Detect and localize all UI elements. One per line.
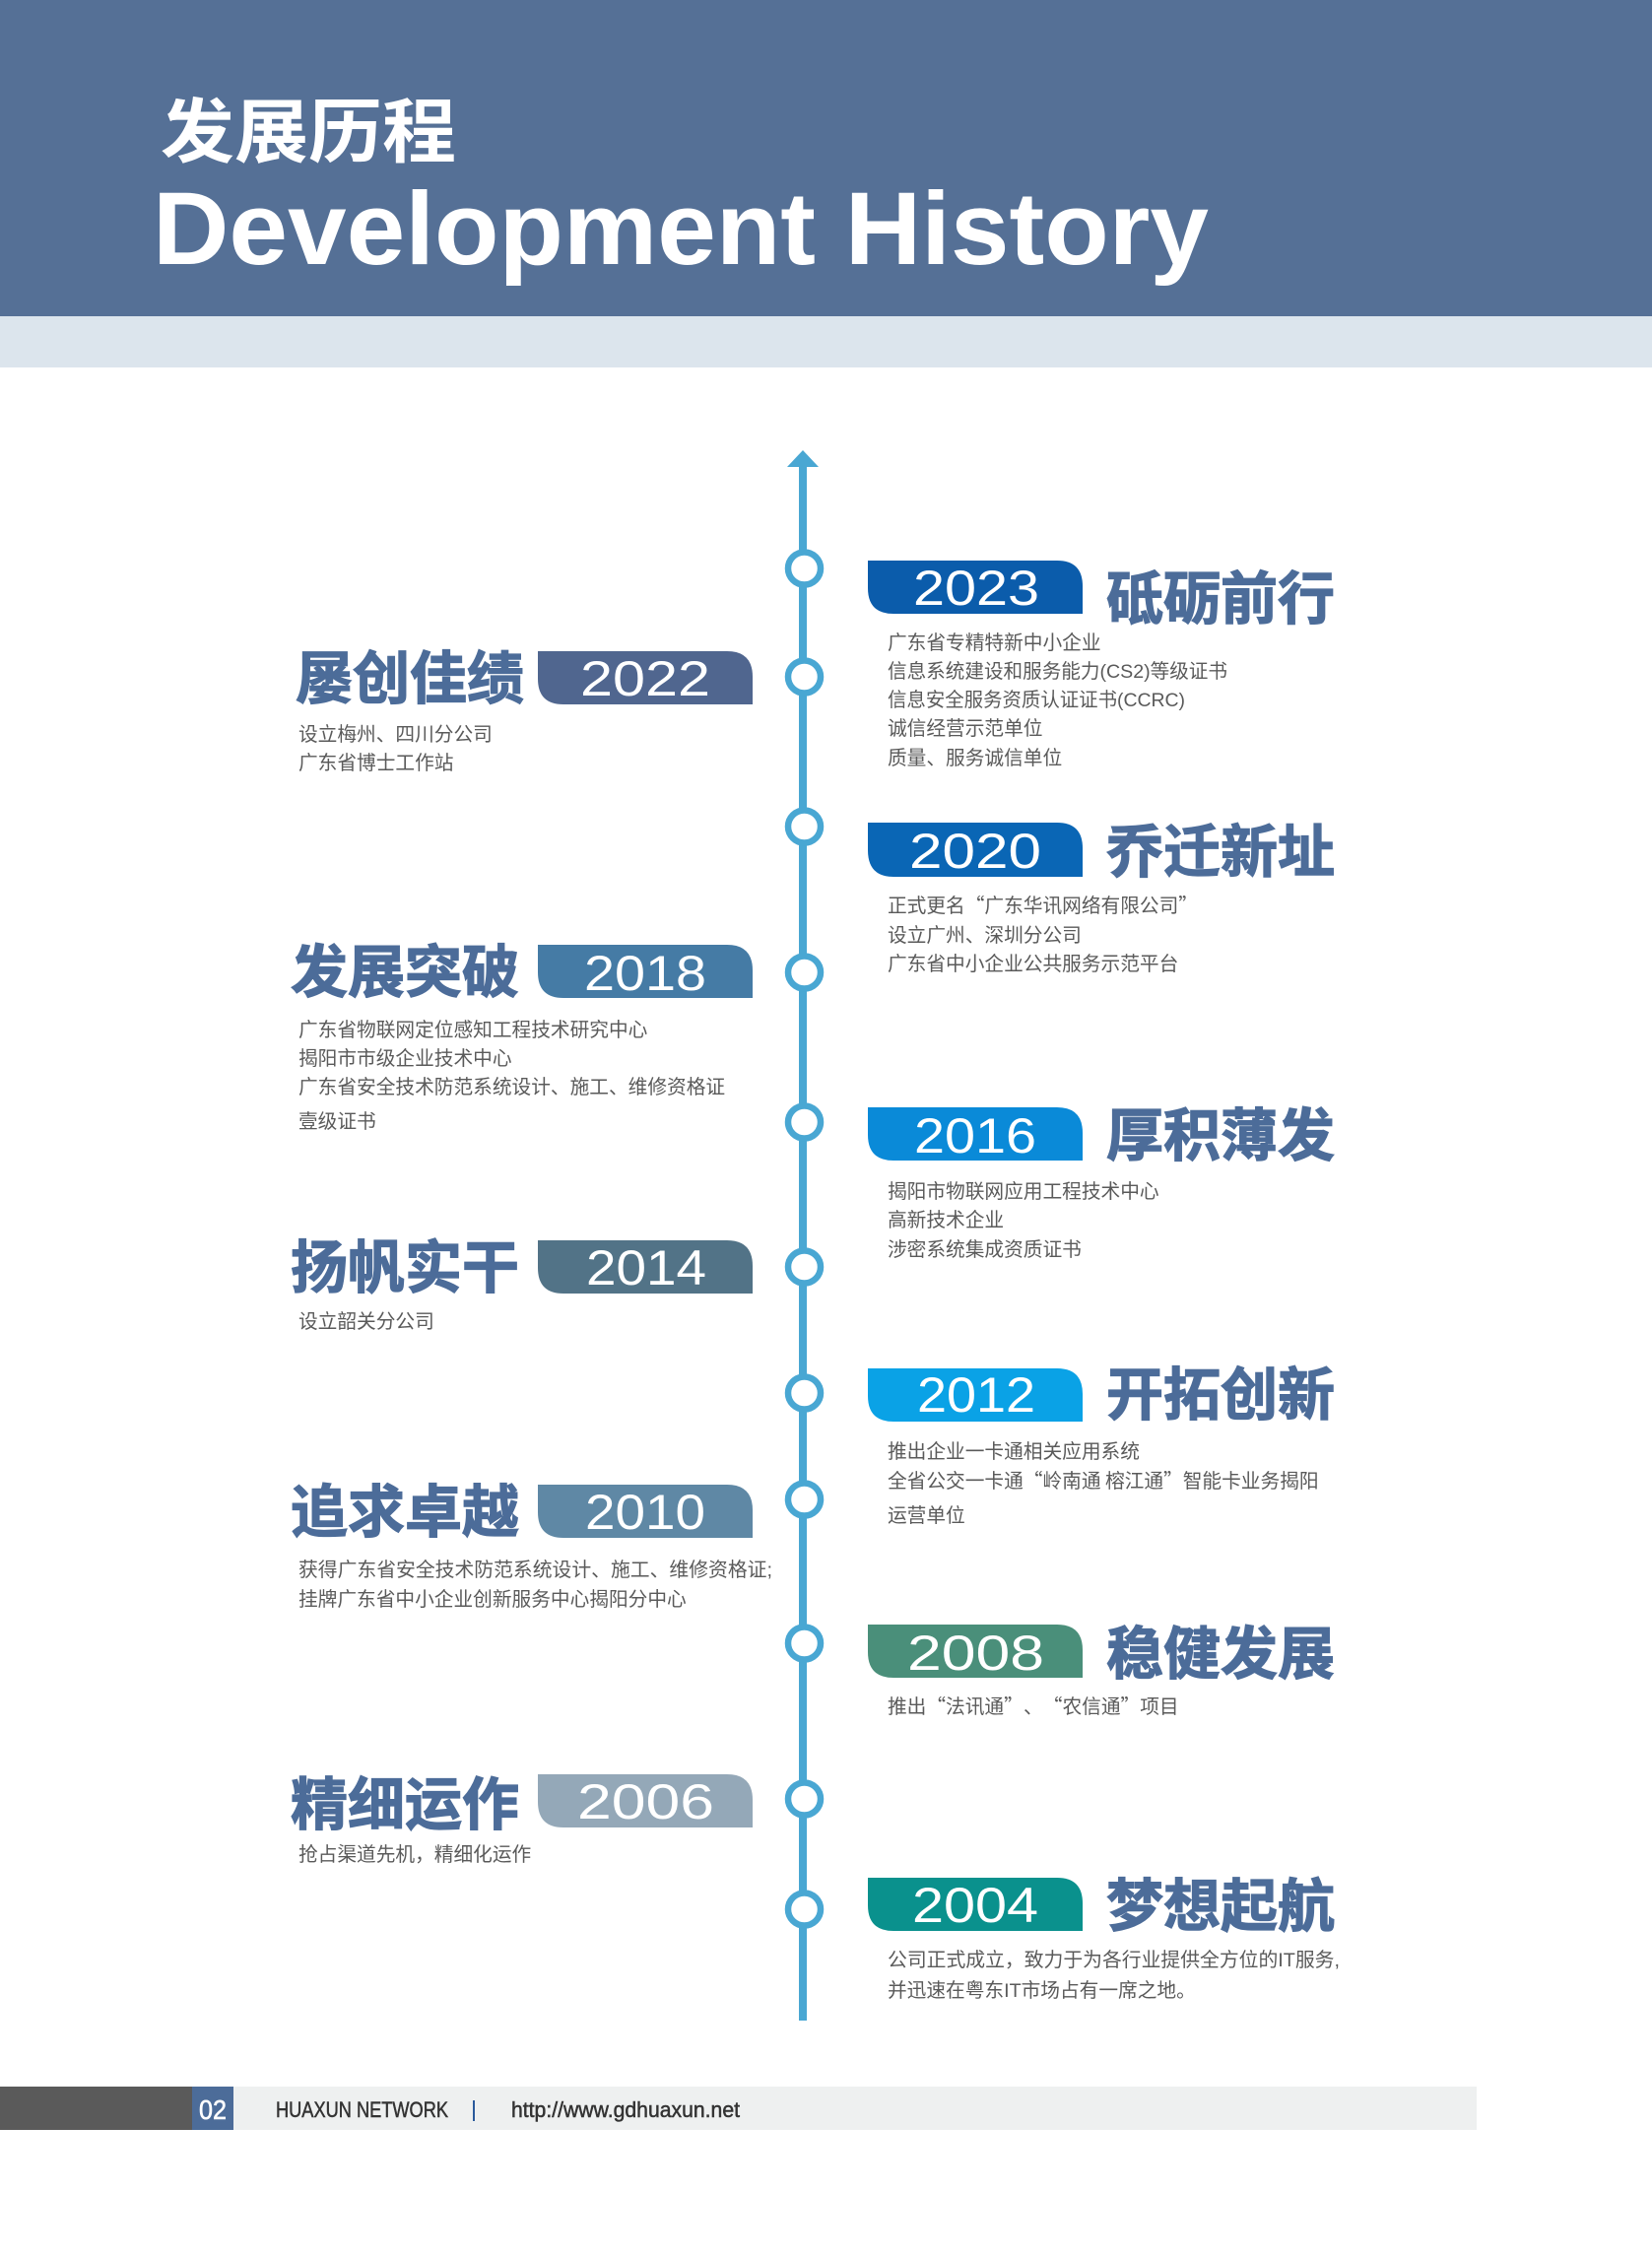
entry 2022: 2022	[580, 651, 710, 706]
entry 2010: 获得广东省安全技术防范系统设计、施工、维修资格证;	[298, 1560, 772, 1581]
entry 2010: 2010	[585, 1485, 705, 1540]
entry 2022: 广东省博士工作站	[298, 753, 453, 774]
entry 2012: 推出企业一卡通相关应用系统	[888, 1441, 1140, 1463]
page number	[192, 2087, 233, 2130]
title: Chinese: 发展历程	[161, 95, 456, 172]
entry 2018: 广东省物联网定位感知工程技术研究中心	[298, 1020, 647, 1041]
company name: HUAXUN NETWORK	[276, 2097, 448, 2122]
entry 2020: 2020	[909, 824, 1041, 879]
entry 2010	[291, 1481, 772, 1611]
entry 2006: 抢占渠道先机，精细化运作	[298, 1844, 531, 1866]
entry 2012: 全省公交一卡通“岭南通 榕江通”智能卡业务揭阳	[888, 1465, 1319, 1494]
entry 2022	[296, 647, 753, 774]
entry 2022: 屡创佳绩	[296, 647, 524, 711]
title: English: Development History	[153, 171, 1209, 287]
entry 2018: 揭阳市市级企业技术中心	[298, 1048, 512, 1070]
entry 2008: 稳健发展	[1106, 1623, 1335, 1687]
footer bar	[0, 2087, 1477, 2130]
entry 2004: 并迅速在粤东IT市场占有一席之地。	[888, 1980, 1196, 2002]
entry 2016: 涉密系统集成资质证书	[888, 1239, 1082, 1261]
entry 2010: 挂牌广东省中小企业创新服务中心揭阳分中心	[298, 1589, 687, 1611]
entry 2023: 信息系统建设和服务能力(CS2)等级证书	[888, 661, 1227, 683]
entry 2023: 广东省专精特新中小企业	[888, 632, 1101, 654]
entry 2018: 发展突破	[291, 941, 519, 1005]
entry 2023: 信息安全服务资质认证证书(CCRC)	[888, 690, 1185, 711]
entry 2012: 开拓创新	[1106, 1363, 1335, 1428]
website url: http://www.gdhuaxun.net	[511, 2097, 740, 2122]
entry 2016	[868, 1104, 1335, 1261]
entry 2014: 设立韶关分公司	[298, 1311, 434, 1333]
entry 2018	[291, 941, 753, 1133]
entry 2016: 揭阳市物联网应用工程技术中心	[888, 1181, 1159, 1203]
entry 2014: 2014	[586, 1240, 706, 1295]
entry 2018: 广东省安全技术防范系统设计、施工、维修资格证	[298, 1077, 725, 1098]
entry 2023	[868, 561, 1335, 769]
entry 2023: 2023	[913, 561, 1039, 616]
entry 2006: 精细运作	[291, 1773, 519, 1837]
entry 2020: 设立广州、深圳分公司	[888, 925, 1082, 947]
entry 2012: 运营单位	[888, 1505, 965, 1527]
entry 2023: 质量、服务诚信单位	[888, 748, 1062, 769]
entry 2018: 2018	[584, 946, 706, 1001]
entry 2018: 壹级证书	[298, 1111, 376, 1133]
entry 2010: 追求卓越	[291, 1481, 519, 1545]
page number: 02	[199, 2094, 227, 2125]
entry 2004	[868, 1875, 1340, 2002]
entry 2020	[868, 821, 1335, 975]
entry 2006: 2006	[577, 1774, 714, 1829]
entry 2016: 厚积薄发	[1106, 1104, 1335, 1168]
entry 2020: 乔迁新址	[1106, 821, 1335, 885]
entry 2004: 梦想起航	[1106, 1875, 1335, 1939]
entry 2023: 砥砺前行	[1106, 567, 1335, 631]
entry 2012	[868, 1363, 1335, 1527]
entry 2020: 正式更名“广东华讯网络有限公司”	[888, 890, 1198, 918]
entry 2023: 诚信经营示范单位	[888, 718, 1042, 740]
entry 2022: 设立梅州、四川分公司	[298, 724, 493, 746]
entry 2012: 2012	[917, 1367, 1035, 1423]
entry 2014: 扬帆实干	[291, 1236, 519, 1300]
timeline nodes	[788, 552, 821, 1925]
entry 2008: 推出“法讯通” 、 “农信通”项目	[888, 1691, 1179, 1719]
header band	[0, 0, 1652, 367]
entry 2016: 高新技术企业	[888, 1210, 1004, 1231]
entry 2006	[291, 1773, 753, 1866]
entry 2004: 2004	[912, 1878, 1038, 1933]
entry 2008: 2008	[907, 1626, 1044, 1681]
entry 2020: 广东省中小企业公共服务示范平台	[888, 954, 1178, 975]
entry 2016: 2016	[914, 1108, 1036, 1163]
entry 2008	[868, 1623, 1335, 1719]
timeline spine with arrow	[787, 450, 819, 2021]
entry 2004: 公司正式成立，致力于为各行业提供全方位的IT服务,	[888, 1950, 1340, 1971]
entry 2014	[291, 1236, 753, 1333]
